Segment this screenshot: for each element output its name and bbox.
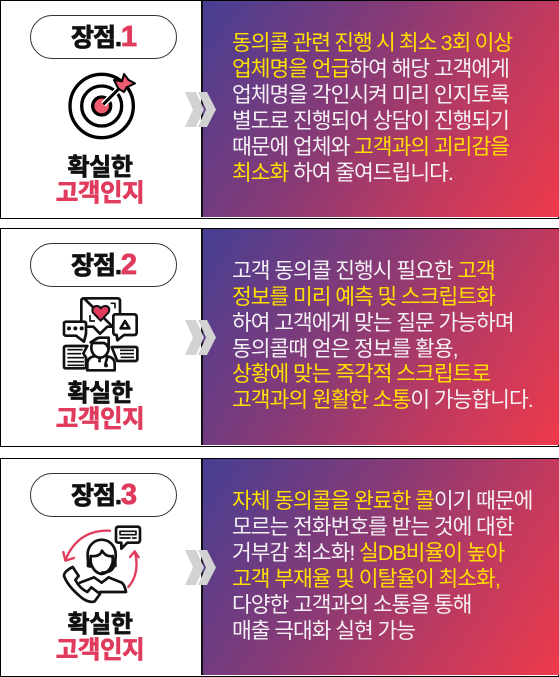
body text: advantage 3: 매출 극대화 실현 가능	[232, 619, 415, 643]
heading: advantage 3: 확실한	[67, 611, 133, 638]
heading: advantage 2	[56, 380, 144, 433]
body text: advantage 1	[232, 31, 512, 185]
icon: chevron arrow 2	[185, 320, 216, 355]
heading: advantage 3	[56, 611, 144, 664]
heading: advantage 3: 고객인지	[56, 637, 144, 664]
panel: advantage 3	[0, 458, 559, 677]
body text: advantage 2: 고객 동의콜 진행시 필요한 고객	[232, 259, 495, 283]
panel: advantage 1	[0, 0, 559, 219]
advantage 3 label pill: 장점.3	[71, 479, 136, 511]
body text: advantage 3: 거부감 최소화! 실DB비율이 높아	[232, 541, 504, 565]
body text: advantage 2: 하여 고객에게 맞는 질문 가능하며	[232, 311, 514, 335]
body text: advantage 3: 모르는 전화번호를 받는 것에 대한	[232, 515, 514, 539]
body text: advantage 2: 동의콜때 얻은 정보를 활용,	[232, 337, 458, 361]
icon: chevron arrow 1	[185, 92, 216, 127]
advantage 3 label pill	[30, 473, 177, 517]
body text: advantage 1: 업체명을 각인시켜 미리 인지토록	[232, 83, 509, 107]
icon: person with speech bubbles	[62, 297, 139, 372]
body text: advantage 2	[232, 259, 533, 412]
advantage 2 label pill	[30, 243, 177, 287]
icon: chevron arrow 3	[185, 550, 216, 585]
panel: advantage 2	[0, 228, 559, 447]
body text: advantage 1: 별도로 진행되어 상담이 진행되기	[232, 109, 509, 133]
advantage 1 label pill: 장점.1	[71, 21, 136, 53]
gradient background	[201, 459, 559, 675]
heading: advantage 2: 확실한	[67, 380, 133, 407]
body text: advantage 2: 정보를 미리 예측 및 스크립트화	[232, 285, 495, 309]
body text: advantage 1: 때문에 업체와 고객과의 괴리감을	[232, 135, 509, 159]
body text: advantage 1: 업체명을 언급하여 해당 고객에게	[232, 57, 509, 81]
body text: advantage 3: 고객 부재율 및 이탈율이 최소화,	[232, 567, 500, 591]
advantage 2 label pill: 장점.2	[71, 249, 136, 281]
heading: advantage 1	[56, 154, 144, 207]
body text: advantage 2: 고객과의 원활한 소통이 가능합니다.	[232, 388, 533, 412]
body text: advantage 1: 동의콜 관련 진행 시 최소 3회 이상	[232, 31, 512, 55]
gradient background	[201, 229, 559, 445]
body text: advantage 3: 자체 동의콜을 완료한 콜이기 때문에	[232, 489, 532, 513]
body text: advantage 1: 최소화 하여 줄여드립니다.	[232, 161, 453, 185]
body text: advantage 2: 상황에 맞는 즉각적 스크립트로	[232, 362, 490, 386]
heading: advantage 1: 확실한	[67, 154, 133, 181]
heading: advantage 1: 고객인지	[56, 180, 144, 207]
body text: advantage 3: 다양한 고객과의 소통을 통해	[232, 593, 471, 617]
body text: advantage 3	[232, 489, 532, 643]
icon: target with arrow	[68, 72, 136, 140]
heading: advantage 2: 고객인지	[56, 406, 144, 433]
gradient background	[201, 1, 559, 217]
advantage 1 label pill	[30, 15, 177, 59]
icon: call agent with phone	[62, 525, 142, 604]
